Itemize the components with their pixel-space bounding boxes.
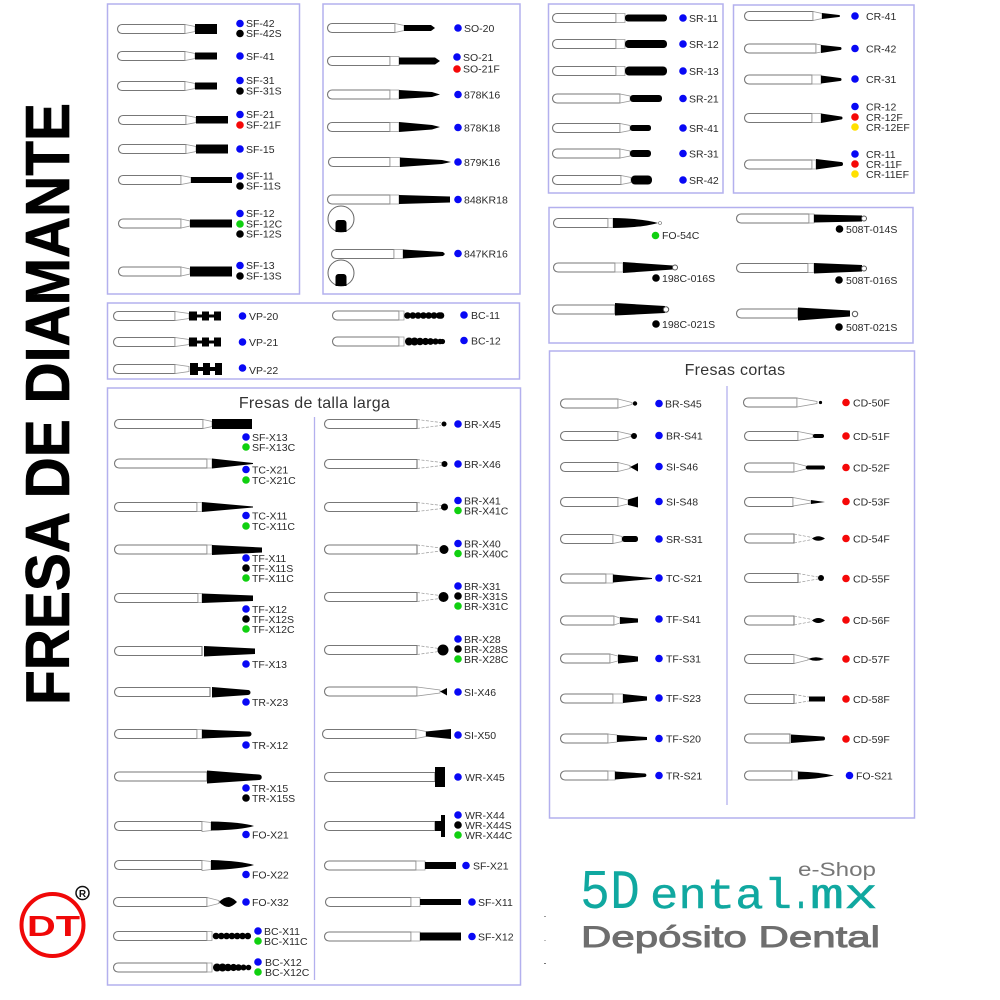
bur SF-21 (118, 109, 281, 132)
bur SF-X13 (114, 419, 296, 454)
bur CR-41 (744, 11, 897, 23)
bur TF-X11: TF-X11 (252, 553, 286, 565)
bur BR-S45: BR-S45 (665, 398, 702, 410)
bur CD-59F: CD-59F (853, 734, 890, 746)
panel: VP and BC burs (108, 303, 520, 379)
bur SI-S46: SI-S46 (666, 462, 698, 474)
bur TC-X11: TC-X11C (252, 521, 295, 533)
bur SR-42 (552, 175, 719, 187)
bur VP-21: VP-21 (249, 337, 278, 349)
logo: 5Dental.mx: ental (650, 872, 792, 921)
bur SI-X50 (322, 729, 496, 742)
bur TR-X23: TR-X23 (252, 697, 288, 709)
bur 879K16 (328, 157, 500, 169)
bur TC-X21 (114, 458, 296, 487)
bur SF-42: SF-42S (246, 28, 282, 40)
bur SF-13: SF-13 (246, 260, 275, 272)
bur BR-X28: BR-X28S (464, 644, 508, 656)
bur CD-56F: CD-56F (853, 615, 890, 627)
bur SR-11: SR-11 (689, 13, 718, 25)
bur BR-X41: BR-X41C (464, 506, 509, 518)
bur TR-X12: TR-X12 (252, 740, 288, 752)
bur CR-12: CR-12F (866, 112, 903, 124)
bur FO-X21 (114, 822, 289, 842)
bur WR-X45: WR-X45 (465, 772, 505, 784)
bur TF-S31 (560, 654, 701, 666)
bur TC-X11 (114, 502, 295, 533)
bur 878K16: 878K16 (464, 90, 500, 102)
bur BC-X11: BC-X11 (264, 926, 300, 938)
bur 198C-016S (554, 262, 715, 285)
bur SF-41 (118, 51, 275, 63)
bur SF-11: SF-11 (246, 170, 274, 182)
bur WR-X45 (324, 767, 505, 787)
bur BR-S45 (560, 398, 702, 410)
bur SO-20: SO-20 (464, 23, 495, 35)
bur CD-52F: CD-52F (853, 462, 890, 474)
bur 508T-021S: 508T-021S (846, 322, 897, 334)
bur SF-X13: SF-X13C (252, 442, 296, 454)
bur CR-41: CR-41 (866, 11, 897, 23)
bur WR-X44: WR-X44C (465, 830, 513, 842)
bur TF-X13 (114, 646, 287, 671)
bur CD-53F (744, 496, 890, 508)
bur TF-X11: TF-X11S (252, 563, 293, 575)
bur TF-X12: TF-X12C (252, 624, 295, 636)
bur BR-X40: BR-X40C (464, 548, 509, 560)
bur SF-15: SF-15 (246, 144, 275, 156)
panel: SF burs (108, 4, 300, 294)
bur CR-12: CR-12EF (866, 122, 910, 134)
logo: 5Dental.mx: mx (810, 872, 878, 921)
bur 508T-016S (736, 263, 897, 287)
bur SR-13: SR-13 (689, 66, 719, 78)
bur BR-X41 (324, 496, 509, 518)
inset: 848KR18 tip (328, 206, 354, 232)
panel: short burs (550, 351, 914, 818)
bur TF-X11 (114, 545, 294, 585)
bur SO-20 (328, 23, 495, 35)
bur TR-X15: TR-X15S (252, 793, 295, 805)
panel: FO, 198C and 508T burs (549, 208, 913, 343)
bur CR-42 (744, 44, 897, 56)
bur SR-12 (552, 39, 719, 51)
bur TC-S21: TC-S21 (666, 573, 702, 585)
bur BR-X45 (324, 419, 501, 431)
bur BR-X45: BR-X45 (464, 419, 501, 431)
bur SF-31 (118, 75, 282, 98)
bur 878K16 (328, 90, 500, 102)
bur FO-X21: FO-X21 (252, 830, 289, 842)
bur TF-X13: TF-X13 (252, 659, 287, 671)
bur BR-X31 (324, 581, 509, 613)
bur 508T-021S (736, 308, 897, 334)
bur SR-S31: SR-S31 (666, 534, 703, 546)
bur 198C-021S: 198C-021S (662, 319, 715, 331)
bur SF-X21: SF-X21 (473, 860, 509, 872)
bur BR-X40 (324, 538, 509, 560)
bur FO-X32: FO-X32 (252, 897, 289, 909)
bur TF-S41: TF-S41 (666, 614, 701, 626)
bur FO-X22 (114, 860, 289, 882)
bur BC-X11 (114, 926, 308, 948)
panel: long shank burs (108, 388, 520, 985)
bur VP-21 (114, 337, 278, 349)
bur SI-X46: SI-X46 (464, 687, 496, 699)
bur SR-21: SR-21 (689, 94, 719, 106)
bur CD-50F: CD-50F (853, 398, 890, 410)
bur SF-12: SF-12C (246, 218, 283, 230)
bur 848KR18: 848KR18 (464, 194, 508, 206)
bur SI-X46 (324, 687, 496, 699)
logo: DT (22, 886, 89, 956)
bur SR-21 (552, 94, 719, 106)
bur VP-20: VP-20 (249, 311, 278, 323)
bur BR-X46 (324, 459, 501, 471)
bur 847KR16 (332, 248, 508, 260)
bur WR-X44: WR-X44 (465, 810, 505, 822)
bur BC-12: BC-12 (471, 336, 501, 348)
bur TF-S20 (560, 734, 701, 746)
bur VP-22: VP-22 (249, 365, 278, 377)
logo: 5Dental.mx: Depósito Dental (581, 921, 880, 954)
bur CD-53F: CD-53F (853, 496, 890, 508)
bur SI-S48: SI-S48 (666, 496, 698, 508)
panel: CR burs (734, 5, 914, 193)
bur 878K18: 878K18 (464, 122, 500, 134)
bur SF-21: SF-21 (246, 109, 275, 121)
logo: DT: R (79, 889, 87, 900)
bur CR-42: CR-42 (866, 44, 897, 56)
bur CR-11: CR-11EF (866, 169, 909, 181)
bur SF-13 (118, 260, 282, 282)
bur SI-S48 (560, 496, 698, 508)
bur SF-X12 (324, 932, 514, 944)
bur BR-S41 (560, 430, 703, 442)
bur CR-12 (744, 102, 910, 134)
bur TC-S21 (560, 573, 702, 585)
bur CR-31: CR-31 (866, 74, 897, 86)
logo: DT: DT (27, 911, 80, 943)
logo: 5Dental.mx: e-Shop (798, 860, 876, 881)
bur SF-41: SF-41 (246, 51, 275, 63)
bur BR-X41: BR-X41 (464, 496, 501, 508)
bur BR-X31: BR-X31C (464, 601, 509, 613)
panel: SO and K burs (323, 4, 520, 294)
bur SF-13: SF-13S (246, 270, 282, 282)
bur SF-31: SF-31S (246, 86, 282, 98)
bur TF-S23 (560, 693, 701, 705)
bur SO-21: SO-21F (463, 64, 500, 76)
bur BC-11: BC-11 (471, 310, 500, 322)
bur TF-X12 (114, 594, 295, 636)
bur 847KR16: 847KR16 (464, 248, 508, 260)
bur FO-54C: FO-54C (662, 230, 700, 242)
bur TR-X23 (114, 687, 288, 709)
title: FRESA DE DIAMANTE (14, 103, 83, 705)
bur FO-54C (554, 218, 700, 242)
bur 878K18 (328, 122, 500, 134)
bur SO-21: SO-21 (463, 52, 494, 64)
bur SF-11 (118, 170, 281, 192)
bur CR-31 (744, 74, 897, 86)
bur CD-54F: CD-54F (853, 534, 890, 546)
logo: 5Dental.mx (580, 860, 880, 954)
bur FO-X22: FO-X22 (252, 870, 289, 882)
bur SF-X13: SF-X13 (252, 432, 288, 444)
bur SF-X11 (326, 897, 513, 909)
bur 508T-014S (736, 214, 897, 236)
bur 508T-016S: 508T-016S (846, 275, 897, 287)
bur BR-X28 (324, 634, 509, 666)
bur CD-55F: CD-55F (853, 574, 890, 586)
bur SF-12 (118, 208, 283, 240)
bur TC-X11: TC-X11 (252, 510, 288, 522)
bur SF-21: SF-21F (246, 120, 281, 132)
bur SF-31: SF-31 (246, 75, 275, 87)
bur CD-57F (744, 654, 890, 666)
inset: 847KR16 tip (328, 260, 354, 286)
bur CD-50F (744, 398, 890, 410)
bur CR-11: CR-11 (866, 149, 896, 161)
bur TR-X15: TR-X15 (252, 783, 288, 795)
bur SR-12: SR-12 (689, 39, 719, 51)
bur SR-31 (552, 148, 719, 160)
panel: SR burs (548, 4, 723, 193)
bur TF-X12: TF-X12 (252, 604, 287, 616)
logo: 5Dental.mx: 5D (580, 861, 640, 925)
bur CD-59F (744, 734, 890, 746)
bur SF-X11: SF-X11 (478, 897, 513, 909)
bur CD-56F (744, 615, 890, 627)
bur BR-X28: BR-X28 (464, 634, 501, 646)
bur SF-11: SF-11S (246, 180, 281, 192)
bur BR-X28: BR-X28C (464, 654, 509, 666)
bur BC-12 (333, 336, 501, 348)
bur SI-X50: SI-X50 (464, 730, 496, 742)
bur FO-X32 (114, 897, 289, 909)
bur TF-S41 (560, 614, 701, 626)
bur TR-S21: TR-S21 (666, 770, 702, 782)
bur 508T-014S: 508T-014S (846, 224, 897, 236)
bur CD-51F (744, 431, 890, 443)
heading: long shank: Fresas de talla larga (239, 395, 390, 412)
bur SF-42 (118, 18, 282, 40)
bur SR-41 (552, 123, 719, 135)
bur SF-42: SF-42 (246, 18, 275, 30)
bur TF-S23: TF-S23 (666, 693, 701, 705)
bur BR-X40: BR-X40 (464, 538, 501, 550)
bur CD-58F: CD-58F (853, 694, 890, 706)
bur TF-X12: TF-X12S (252, 614, 294, 626)
bur SR-41: SR-41 (689, 123, 719, 135)
bur BC-X11: BC-X11C (264, 936, 308, 948)
bur FO-S21: FO-S21 (856, 770, 893, 782)
bur SR-11 (552, 13, 718, 25)
bur CD-55F (744, 574, 890, 586)
bur CD-57F: CD-57F (853, 654, 890, 666)
bur BR-S41: BR-S41 (666, 430, 703, 442)
bur WR-X44: WR-X44S (465, 820, 512, 832)
bur BR-X31: BR-X31S (464, 591, 508, 603)
bur SR-13 (552, 66, 719, 78)
bur BC-X12: BC-X12C (265, 967, 310, 979)
bur SF-X21 (324, 860, 509, 872)
bur CR-12: CR-12 (866, 102, 897, 114)
bur SO-21 (328, 52, 500, 76)
bur CD-54F (744, 534, 890, 546)
bur CD-58F (744, 694, 890, 706)
bur 198C-016S: 198C-016S (662, 273, 715, 285)
bur TF-X11: TF-X11C (252, 573, 294, 585)
bur TC-X21: TC-X21C (252, 475, 296, 487)
bur BC-X12: BC-X12 (265, 957, 302, 969)
bur 198C-021S (552, 303, 715, 331)
bur 848KR18 (328, 194, 508, 206)
bur TR-X15 (114, 770, 295, 805)
bur BC-11 (333, 310, 500, 322)
bur SF-12: SF-12 (246, 208, 275, 220)
bur VP-22 (114, 363, 278, 377)
bur SF-15 (118, 144, 275, 156)
heading: short burs: Fresas cortas (685, 362, 785, 379)
bur BR-X31: BR-X31 (464, 581, 501, 593)
bur 879K16: 879K16 (464, 157, 500, 169)
bur SF-X12: SF-X12 (478, 932, 514, 944)
bur CR-11 (744, 149, 909, 181)
bur WR-X44 (324, 810, 513, 842)
bur SI-S46 (560, 462, 698, 474)
bur FO-S21 (744, 770, 893, 782)
bur TF-S31: TF-S31 (666, 654, 701, 666)
bur BR-X46: BR-X46 (464, 459, 501, 471)
bur SR-42: SR-42 (689, 175, 719, 187)
bur TC-X21: TC-X21 (252, 464, 288, 476)
bur TF-S20: TF-S20 (666, 734, 701, 746)
bur TR-S21 (560, 770, 702, 782)
bur SF-12: SF-12S (246, 228, 282, 240)
bur CD-51F: CD-51F (853, 431, 890, 443)
bur CD-52F (744, 462, 890, 474)
logo: 5Dental.mx: . (792, 872, 810, 921)
bur SR-31: SR-31 (689, 148, 719, 160)
bur BC-X12 (114, 957, 310, 979)
bur VP-20 (114, 311, 278, 323)
bur CR-11: CR-11F (866, 159, 902, 171)
bur SR-S31 (560, 534, 703, 546)
bur TR-X12 (114, 730, 288, 752)
